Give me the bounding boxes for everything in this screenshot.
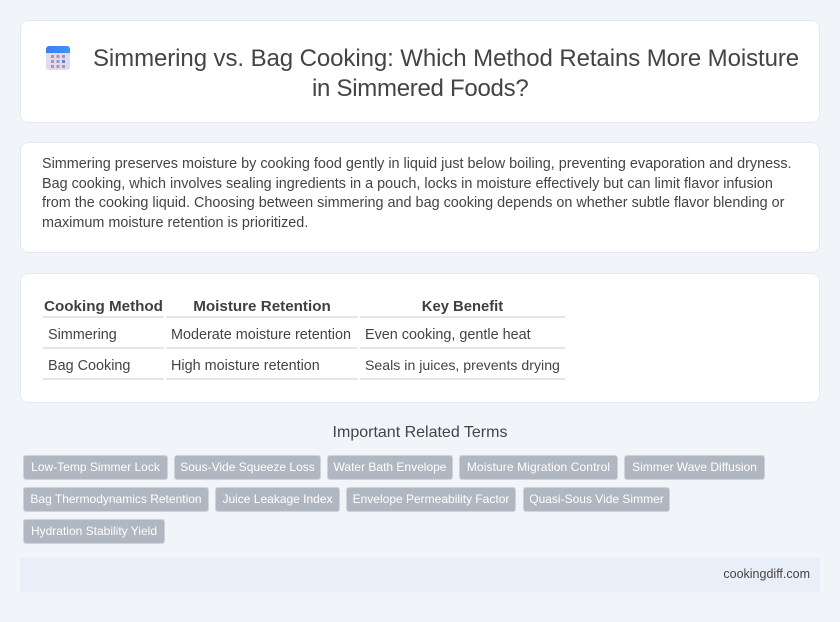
tag: Moisture Migration Control — [467, 460, 610, 474]
tag: Quasi-Sous Vide Simmer — [529, 492, 664, 506]
tag — [523, 487, 670, 512]
cell: bag cooking: Bag Cooking — [48, 358, 130, 374]
summary text: from the cooking liquid. Choosing between simmering and bag cooking depends on whether subtle flavor blending or — [42, 195, 784, 211]
tag — [215, 487, 340, 512]
cell: high moisture retention: High moisture retention — [171, 358, 320, 374]
cell: moderate moisture retention: Moderate moisture retention — [171, 327, 351, 343]
panel: title card — [20, 20, 820, 123]
cell: even cooking: Even cooking, gentle heat — [365, 327, 531, 343]
footer bar — [20, 558, 820, 592]
tag — [459, 455, 618, 480]
panel: summary card — [20, 142, 820, 253]
tag — [327, 455, 453, 480]
tag: Hydration Stability Yield — [31, 524, 157, 538]
tag — [23, 487, 209, 512]
summary text: Bag cooking, which involves sealing ingredients in a pouch, locks in moisture effectively but can limit flavor infusion — [42, 176, 773, 192]
column header: cooking method: Cooking Method — [44, 298, 163, 315]
tag: Water Bath Envelope — [334, 460, 446, 474]
column header: key benefit: Key Benefit — [422, 299, 503, 315]
tag — [23, 455, 168, 480]
tag — [346, 487, 516, 512]
table: cooking method comparison — [43, 298, 565, 380]
tag: Low-Temp Simmer Lock — [31, 460, 160, 474]
tag: Envelope Permeability Factor — [353, 492, 509, 506]
tag: Sous-Vide Squeeze Loss — [180, 460, 315, 474]
summary text — [42, 156, 792, 231]
tag — [23, 519, 165, 544]
tag — [624, 455, 765, 480]
heading: related terms: Important Related Terms — [333, 424, 507, 441]
title: Simmering vs. Bag Cooking: Which Method Retains More Moisture — [93, 45, 799, 72]
panel: comparison table card — [20, 273, 820, 403]
summary text: Simmering preserves moisture by cooking food gently in liquid just below boiling, preventing evaporation and dryness. — [42, 156, 792, 172]
title — [93, 45, 799, 102]
summary text: maximum moisture retention is prioritized. — [42, 215, 308, 231]
footer source: cookingdiff.com — [723, 567, 810, 581]
tag list — [23, 455, 765, 544]
tag — [174, 455, 321, 480]
cell: seals in juices: Seals in juices, prevents drying — [365, 357, 560, 373]
column header: moisture retention: Moisture Retention — [193, 298, 331, 315]
tag: Bag Thermodynamics Retention — [30, 492, 202, 506]
cell: simmering: Simmering — [48, 327, 117, 343]
icon: calendar — [46, 46, 70, 70]
title: in Simmered Foods? — [312, 75, 528, 102]
tag: Juice Leakage Index — [222, 492, 333, 506]
tag: Simmer Wave Diffusion — [632, 460, 757, 474]
